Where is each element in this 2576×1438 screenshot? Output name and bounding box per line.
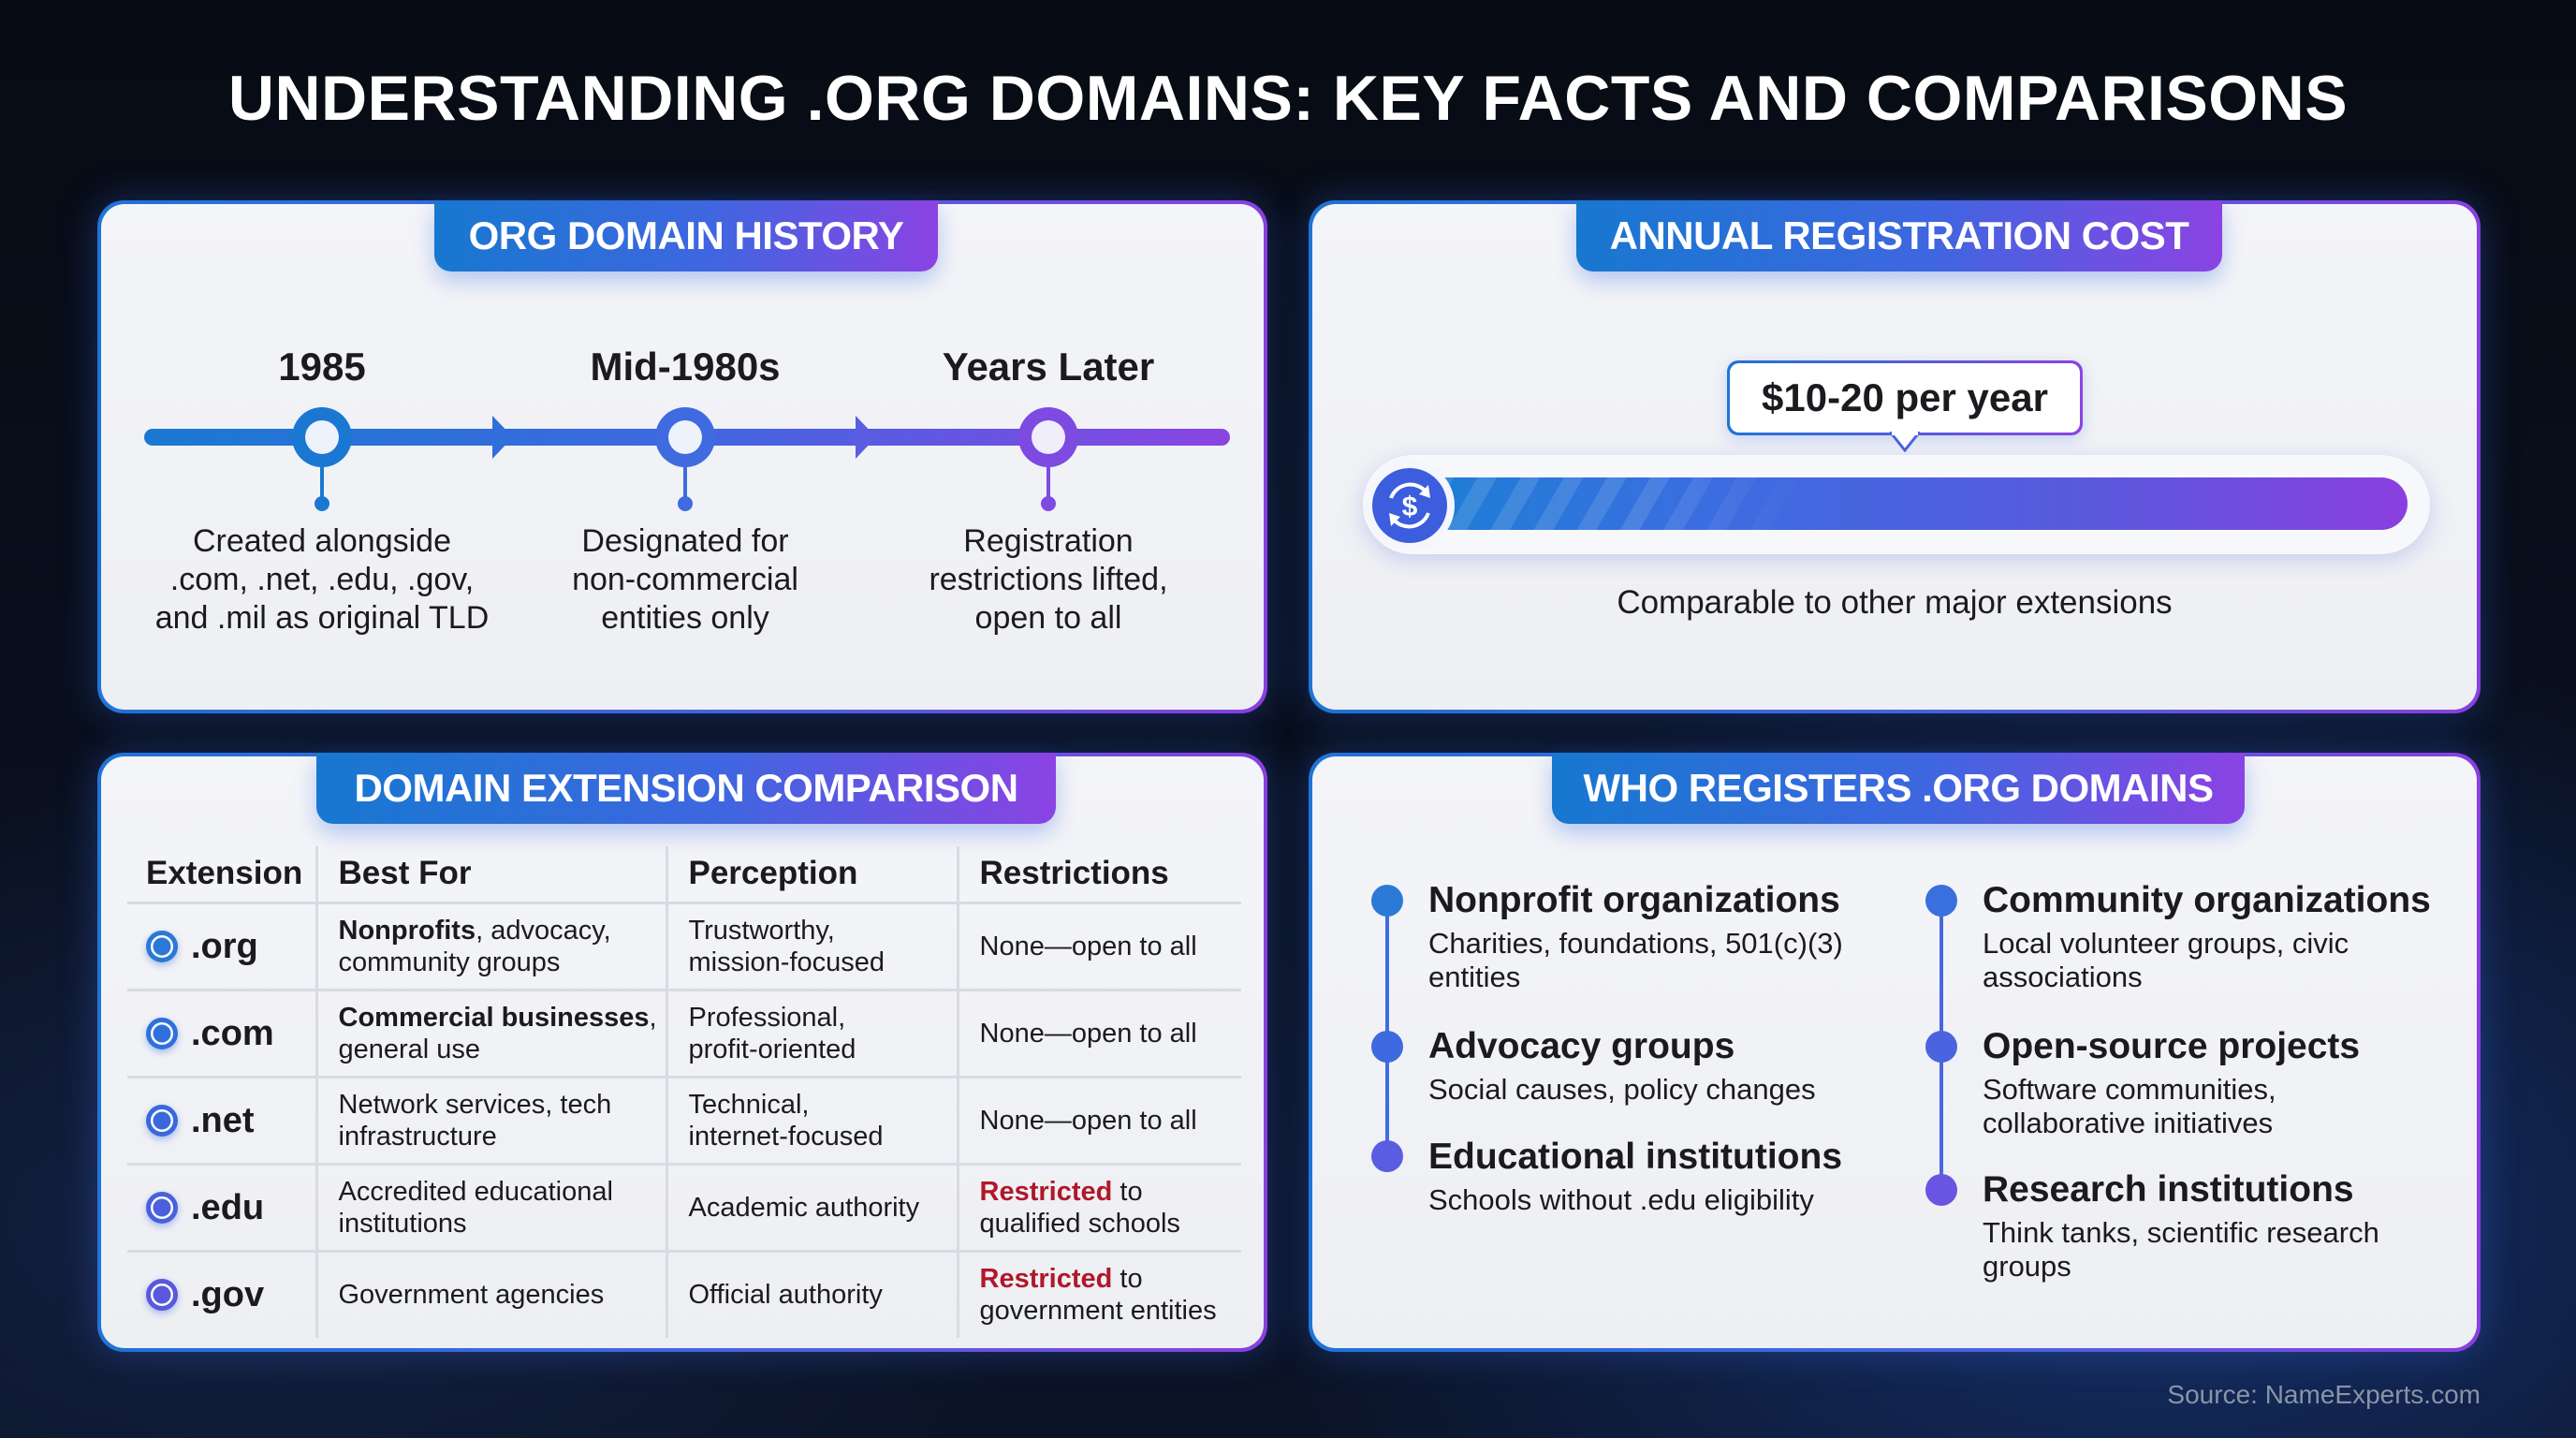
item: nonprofit organizations: entities [1428,961,1520,993]
item: community organizations: Community organizations [1983,880,2431,920]
text: Mid-1980s description: Designated for [581,523,789,559]
icon: dollar exchange [1372,468,1455,543]
item: educational institutions [1428,1137,1842,1216]
item: research institutions: Research institutions [1983,1169,2354,1210]
callout: price: $10-20 per year [1762,375,2048,419]
panel: annual registration cost [1309,200,2481,713]
table: comparison: internet-focused [689,1122,883,1152]
table: comparison: Restricted to [979,1176,1143,1206]
text: comparable note: Comparable to other major extensions [1617,584,2173,621]
header: who registers: WHO REGISTERS .ORG DOMAINS [1583,766,2214,810]
table: comparison: Technical, [689,1090,809,1120]
table: comparison: .edu [191,1187,264,1226]
header: domain extension comparison: DOMAIN EXTENSION COMPARISON [354,766,1018,810]
text: Years Later description: open to all [975,600,1121,636]
milestone: 1985: 1985 [278,345,366,389]
header: annual registration cost [1576,200,2222,271]
table: comparison: community groups [339,947,560,977]
item: nonprofit organizations [1428,880,1843,993]
item: open-source projects: Software communities, [1983,1073,2276,1106]
table: comparison: None—open to all [979,1019,1197,1049]
table: comparison: government entities [979,1296,1217,1326]
table: comparison: mission-focused [689,947,885,977]
table: comparison: .com [191,1013,274,1052]
item: advocacy groups: Advocacy groups [1428,1026,1734,1066]
icon: dollar exchange: $ [1402,492,1418,522]
header: domain extension comparison [316,753,1056,824]
table: comparison: None—open to all [979,931,1197,961]
text: 1985 description: .com, .net, .edu, .gov, [170,562,474,597]
table: comparison: profit-oriented [689,1034,856,1064]
table: comparison: Restrictions [979,855,1169,891]
item: open-source projects [1983,1026,2360,1139]
panel: domain extension comparison [97,753,1267,1352]
table: comparison: Professional, [689,1002,845,1032]
text: Mid-1980s description [572,523,798,636]
table: comparison: Extension [146,855,302,891]
item: educational institutions: Schools without .edu eligibility [1428,1183,1814,1216]
table: comparison: Best For [339,855,471,891]
table: comparison: Restricted to [979,1264,1143,1294]
table: comparison: .gov [191,1275,264,1314]
item: community organizations: associations [1983,961,2143,993]
text: Years Later description: restrictions lifted, [929,562,1168,597]
table: comparison: Commercial businesses, [339,1002,657,1032]
table: comparison [127,846,1241,1338]
item: nonprofit organizations: Charities, foundations, 501(c)(3) [1428,927,1843,960]
item: open-source projects: collaborative initiatives [1983,1107,2273,1139]
table: comparison: Network services, tech [339,1090,611,1120]
item: advocacy groups [1428,1026,1816,1106]
header: who registers [1552,753,2245,824]
table: comparison: Official authority [689,1280,883,1310]
text: 1985 description: and .mil as original TLD [155,600,489,636]
text: Mid-1980s description: entities only [601,600,769,636]
connector lines [1371,885,1957,1206]
item: open-source projects: Open-source projects [1983,1026,2360,1066]
text: 1985 description: Created alongside [193,523,451,559]
text: Years Later description [929,523,1168,636]
header: annual registration cost: ANNUAL REGISTRATION COST [1610,213,2188,257]
panel: org domain history [97,200,1267,713]
table: comparison: Academic authority [689,1193,919,1223]
header: org domain history [434,200,938,271]
text: 1985 description [155,523,489,636]
callout: price [1727,360,2083,435]
milestone: Mid-1980s: Mid-1980s [590,345,781,389]
table: comparison: Perception [689,855,857,891]
timeline [144,407,1230,511]
item: community organizations [1983,880,2431,993]
source note: Source: NameExperts.com [2167,1380,2481,1409]
item: community organizations: Local volunteer groups, civic [1983,927,2349,960]
item: nonprofit organizations: Nonprofit organizations [1428,880,1840,920]
item: research institutions: groups [1983,1250,2071,1283]
table: comparison: Government agencies [339,1280,604,1310]
table: comparison: qualified schools [979,1208,1180,1238]
table: comparison: Accredited educational [339,1176,613,1206]
table: comparison: Nonprofits, advocacy, [339,916,611,946]
title: UNDERSTANDING .ORG DOMAINS: KEY FACTS AND COMPARISONS [228,63,2348,134]
bar: cost range [1363,455,2430,554]
table: comparison: .net [191,1101,255,1140]
item: research institutions: Think tanks, scientific research [1983,1216,2379,1249]
table: comparison: infrastructure [339,1122,497,1152]
item: advocacy groups: Social causes, policy changes [1428,1073,1816,1106]
header: org domain history: ORG DOMAIN HISTORY [469,213,903,257]
panel: who registers .org domains [1309,753,2481,1352]
item: educational institutions: Educational institutions [1428,1137,1842,1177]
text: Years Later description: Registration [963,523,1134,559]
item: research institutions [1983,1169,2379,1283]
milestone: Years Later: Years Later [943,345,1154,389]
table: comparison: institutions [339,1208,467,1238]
table: comparison: .org [191,927,258,966]
table: comparison: None—open to all [979,1105,1197,1135]
table: comparison: Trustworthy, [689,916,835,946]
text: Mid-1980s description: non-commercial [572,562,798,597]
table: comparison: general use [339,1034,480,1064]
